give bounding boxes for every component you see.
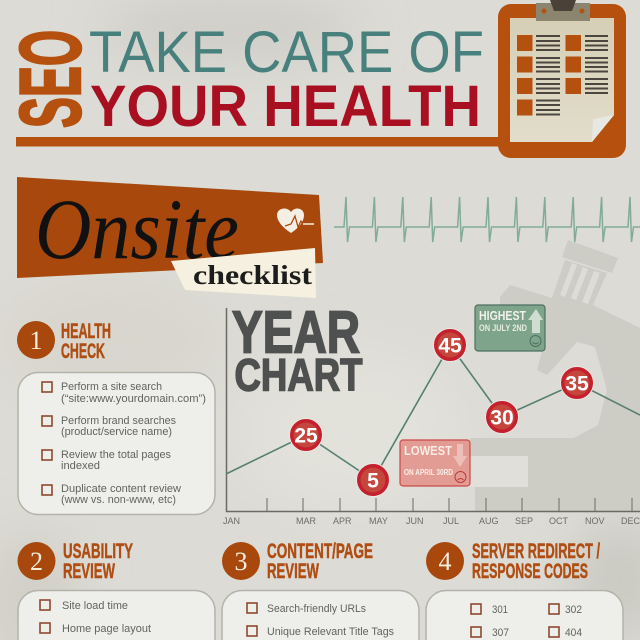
title: Your health: YOUR HEALTH [90, 74, 481, 139]
data point 5: 5 [367, 470, 379, 492]
chart title: Chart: CHART [234, 350, 362, 400]
data point 35 [560, 366, 594, 400]
year line chart: OCT [549, 516, 568, 526]
banner: checklist label [171, 248, 316, 298]
panel: health check list: (product/service name) [61, 426, 172, 438]
panel: health check list [18, 372, 215, 514]
data point 25 [290, 418, 322, 452]
number badge 1: 1 [30, 326, 42, 355]
number badge 1 [17, 321, 55, 359]
panel: response codes list: 301 [492, 604, 508, 616]
year line chart: AUG [479, 516, 499, 526]
banner text: Onsite: Onsite [35, 181, 239, 277]
year line chart: JUN [406, 516, 424, 526]
callout: highest: HIGHEST [479, 308, 526, 323]
callout: lowest [400, 440, 470, 486]
panel: content list: Unique Relevant Title Tags [267, 626, 394, 638]
number badge 2: 2 [30, 547, 43, 576]
icon: clipboard [498, 0, 626, 158]
panel: response codes list: 307 [492, 627, 509, 639]
number badge 4: 4 [438, 547, 452, 576]
panel: health check list: (www vs. non-www, etc) [61, 494, 176, 506]
year line chart: JAN [223, 516, 240, 526]
panel: content list: Search-friendly URLs [267, 603, 366, 615]
year line chart: MAR [296, 516, 316, 526]
callout: highest: ON JULY 2ND [479, 323, 527, 334]
number badge 3: 3 [234, 547, 248, 576]
section 2: usability review [18, 540, 215, 640]
title: Take care of: TAKE CARE OF [89, 20, 484, 85]
number badge 3 [222, 542, 260, 580]
ecg line [334, 197, 640, 242]
panel: response codes list [426, 590, 623, 640]
banner: checklist label: checklist [193, 260, 312, 290]
year line chart [223, 308, 640, 526]
data point 45: 45 [438, 334, 462, 358]
callout: lowest: LOWEST [404, 443, 452, 458]
panel: response codes list: 404 [565, 627, 582, 639]
icon: heart with pulse [277, 208, 314, 233]
section 1: health check [17, 320, 215, 514]
data point 45 [434, 328, 466, 362]
data point 25: 25 [294, 424, 318, 448]
year line chart: DEC [621, 516, 640, 526]
panel: usability list: Site load time [62, 600, 128, 612]
heading: server redirect / response codes [472, 540, 600, 583]
header underline bar [16, 137, 506, 146]
heading: usability review [63, 540, 133, 583]
panel: health check list: (“site:www.yourdomain.com”) [61, 393, 206, 405]
data point 30 [486, 400, 518, 434]
year line chart: NOV [585, 516, 605, 526]
panel: response codes list: 302 [565, 604, 582, 616]
heading: usability review: REVIEW [63, 560, 115, 583]
heading: health check [61, 320, 111, 363]
number badge 2 [18, 542, 56, 580]
banner: onsite [17, 177, 323, 278]
year line chart: MAY [369, 516, 388, 526]
panel: usability list [18, 590, 215, 640]
panel: health check list: Review the total pages [61, 449, 171, 461]
microscope background [470, 240, 640, 511]
panel: content list [222, 590, 419, 640]
data point 35: 35 [565, 372, 589, 396]
callout: lowest: ON APRIL 30RD [404, 468, 453, 477]
section 4: server redirect / response codes [426, 540, 623, 640]
data point 5 [356, 464, 390, 496]
heading: content/page review: CONTENT/PAGE [267, 540, 373, 563]
heading: health check: HEALTH [61, 320, 111, 343]
heading: content/page review: REVIEW [267, 560, 319, 583]
year line chart: SEP [515, 516, 533, 526]
panel: health check list: indexed [61, 460, 100, 472]
year line chart: JUL [443, 516, 459, 526]
panel: health check list: Perform brand searches [61, 415, 176, 427]
panel: usability list: Home page layout [62, 623, 151, 635]
panel: health check list: Duplicate content review [61, 483, 181, 495]
section 3: content/page review [222, 540, 419, 640]
heading: content/page review [267, 540, 373, 583]
chart title: Year: YEAR [232, 300, 360, 366]
heading: health check: CHECK [61, 340, 105, 363]
year line chart: APR [333, 516, 352, 526]
heading: usability review: USABILITY [63, 540, 133, 563]
number badge 4 [426, 542, 464, 580]
panel: health check list: Perform a site search [61, 381, 162, 393]
data point 30: 30 [490, 406, 514, 430]
callout: highest [475, 305, 545, 351]
